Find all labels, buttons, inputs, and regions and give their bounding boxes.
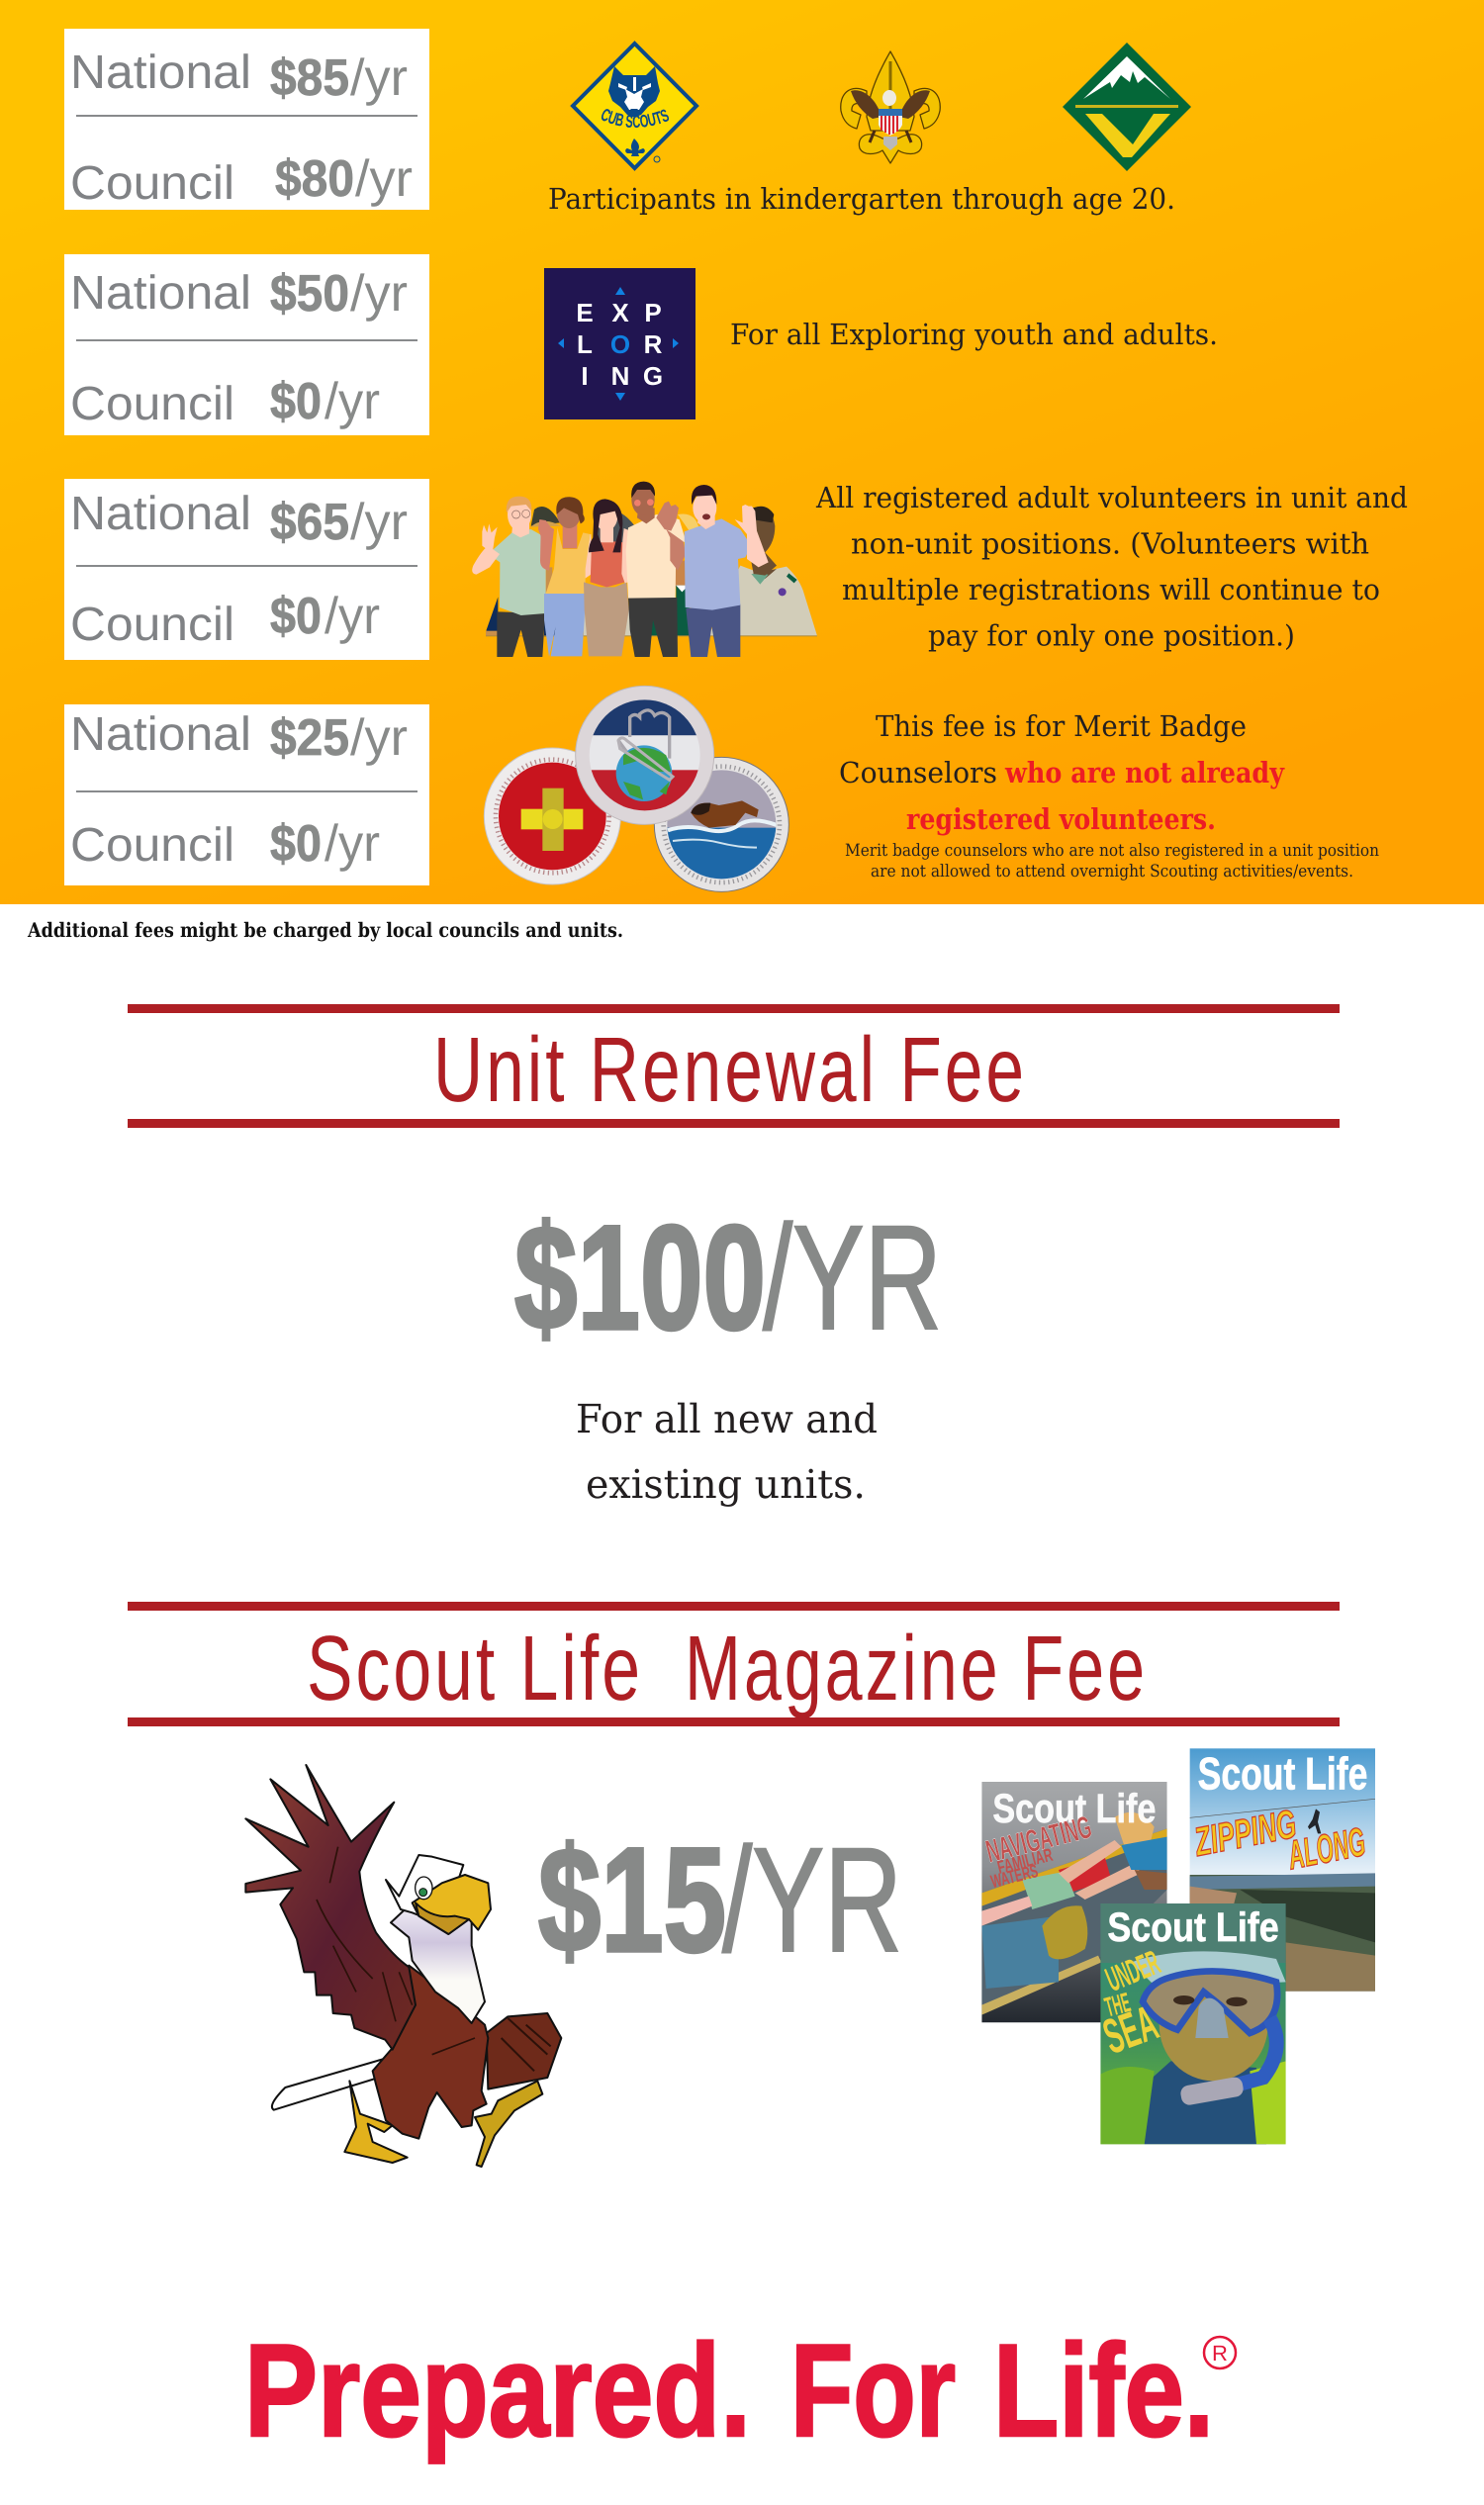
icon: Exploring logo: R bbox=[644, 329, 663, 359]
illustration: group of waving adult volunteers bbox=[472, 482, 817, 657]
fee card: exploring: /yr bbox=[350, 265, 408, 323]
text: merit badge counselor description: Merit badge counselors who are not also registered in a unit position bbox=[845, 841, 1379, 861]
badge: citizenship in the world bbox=[576, 686, 714, 824]
logo: Prepared. For Life. tagline: Prepared. bbox=[244, 2318, 751, 2464]
text: adult volunteers description bbox=[815, 481, 1408, 653]
logo: Prepared. For Life. tagline: For bbox=[790, 2318, 956, 2464]
illustration: Scout Life magazine covers bbox=[981, 1748, 1375, 2144]
fee card: youth: Council bbox=[70, 157, 234, 210]
price: $15 per year: $15 bbox=[538, 1816, 726, 1983]
fee card: adult volunteers bbox=[64, 479, 429, 660]
text: unit renewal description bbox=[576, 1397, 878, 1508]
illustration: waving eagle mascot bbox=[245, 1765, 561, 2167]
fee card: adult volunteers: National bbox=[70, 488, 251, 540]
cover: zipping along: Scout Life bbox=[1198, 1748, 1367, 1800]
icon: Exploring logo: X bbox=[611, 298, 629, 327]
text: merit badge counselor description: are not allowed to attend overnight Scouting activities/events. bbox=[871, 862, 1353, 881]
fee card: merit badge counselors: $25 bbox=[270, 709, 349, 767]
text: merit badge counselor description bbox=[839, 709, 1379, 881]
logo: Prepared. For Life. tagline bbox=[244, 2318, 1236, 2464]
heading: Unit Renewal Fee: Unit Renewal Fee bbox=[433, 1018, 1027, 1121]
text: unit renewal description: For all new and bbox=[576, 1397, 878, 1442]
cover: navigating familiar waters: NAVIGATING bbox=[982, 1809, 1095, 1869]
icon: Exploring logo: N bbox=[611, 361, 629, 391]
text: adult volunteers description: multiple registrations will continue to bbox=[842, 573, 1380, 606]
logo: Prepared. For Life. tagline: Life. bbox=[993, 2318, 1214, 2464]
fee card: adult volunteers: /yr bbox=[350, 494, 408, 551]
fee card: exploring: /yr bbox=[325, 373, 380, 430]
fee card: exploring bbox=[64, 254, 429, 435]
fee card: merit badge counselors: /yr bbox=[350, 709, 408, 767]
icon: BSA fleur-de-lis emblem bbox=[841, 51, 940, 163]
text: unit renewal description: existing units. bbox=[586, 1462, 866, 1508]
text: merit badge counselor description: This fee is for Merit Badge bbox=[876, 709, 1247, 743]
text: adult volunteers description: pay for only one position.) bbox=[928, 619, 1295, 653]
fee card: adult volunteers: $0 bbox=[270, 588, 322, 645]
cover: under the sea: SEA bbox=[1096, 1995, 1164, 2065]
icon: Cub Scouts diamond bbox=[570, 41, 699, 171]
heading: Unit Renewal Fee bbox=[128, 1004, 1340, 1128]
price: $100 per year: $100 bbox=[514, 1194, 766, 1360]
heading: Scout Life Magazine Fee bbox=[128, 1602, 1340, 1726]
fee card: merit badge counselors: $0 bbox=[270, 815, 322, 873]
cover: under the sea: UNDER bbox=[1100, 1943, 1165, 1998]
fee card: merit badge counselors: Council bbox=[70, 819, 234, 872]
fee card: youth: National bbox=[70, 46, 251, 99]
price: $100 per year: /YR bbox=[763, 1194, 942, 1360]
orange background panel bbox=[0, 0, 1484, 904]
text: merit badge counselor description: who are not already bbox=[1004, 756, 1285, 789]
text: merit badge counselor description: Counselors bbox=[839, 756, 997, 789]
fee card: youth: $85 bbox=[270, 49, 349, 107]
footnote: additional fees: Additional fees might be charged by local councils and units. bbox=[27, 918, 623, 942]
fee card: merit badge counselors bbox=[64, 704, 429, 885]
illustration: three merit badges bbox=[484, 686, 788, 891]
cover: navigating familiar waters: WATERS bbox=[988, 1860, 1040, 1892]
icon: Exploring logo: G bbox=[643, 361, 663, 391]
icon: Cub Scouts diamond: CUB SCOUTS bbox=[602, 109, 669, 129]
fee card: merit badge counselors: /yr bbox=[325, 815, 380, 873]
fee card: adult volunteers: /yr bbox=[325, 588, 380, 645]
cover: navigating familiar waters: Scout Life bbox=[992, 1786, 1156, 1831]
fee card: youth: /yr bbox=[350, 49, 408, 107]
badge: swimming bbox=[654, 757, 788, 891]
heading: Scout Life Magazine Fee: Scout Life bbox=[307, 1617, 643, 1719]
text: youth description: Participants in kindergarten through age 20. bbox=[548, 182, 1175, 216]
icon: Exploring logo: P bbox=[644, 298, 662, 327]
icon: Exploring logo: E bbox=[576, 298, 594, 327]
fee card: youth: $80 bbox=[275, 150, 354, 208]
fee card: exploring: $50 bbox=[270, 265, 349, 323]
badge: first aid bbox=[484, 748, 620, 884]
cover: under the sea bbox=[1096, 1903, 1286, 2144]
text: adult volunteers description: non-unit positions. (Volunteers with bbox=[851, 526, 1369, 560]
logo: Prepared. For Life. tagline: R bbox=[1212, 2341, 1228, 2366]
cover: under the sea: Scout Life bbox=[1107, 1904, 1279, 1950]
cover: navigating familiar waters bbox=[981, 1782, 1167, 2022]
icon: Exploring logo: O bbox=[610, 329, 630, 359]
icon: Exploring logo bbox=[544, 268, 696, 419]
fee card: exploring: $0 bbox=[270, 373, 322, 430]
text: merit badge counselor description: registered volunteers. bbox=[906, 802, 1216, 836]
text: adult volunteers description: All registered adult volunteers in unit and bbox=[815, 481, 1408, 514]
cover: zipping along: ZIPPING bbox=[1190, 1801, 1300, 1865]
cover: navigating familiar waters: FAMILIAR bbox=[995, 1844, 1055, 1878]
heading: Scout Life Magazine Fee: Magazine Fee bbox=[685, 1617, 1148, 1719]
fee card: youth bbox=[64, 29, 429, 210]
icon: Exploring logo: I bbox=[581, 361, 589, 391]
cover: zipping along: ALONG bbox=[1283, 1818, 1369, 1878]
fee card: adult volunteers: Council bbox=[70, 599, 234, 651]
price: $15 per year: /YR bbox=[722, 1816, 902, 1983]
cover: under the sea: THE bbox=[1101, 1987, 1134, 2022]
fee card: exploring: National bbox=[70, 267, 251, 320]
fee card: youth: /yr bbox=[355, 150, 413, 208]
icon: Venturing diamond bbox=[1063, 43, 1191, 171]
fee card: merit badge counselors: National bbox=[70, 708, 251, 761]
fee card: exploring: Council bbox=[70, 378, 234, 430]
text: exploring description: For all Exploring youth and adults. bbox=[730, 318, 1218, 351]
icon: Exploring logo: L bbox=[577, 329, 593, 359]
price: $15 per year bbox=[538, 1816, 902, 1983]
fee card: adult volunteers: $65 bbox=[270, 494, 349, 551]
cover: zipping along bbox=[1190, 1748, 1375, 1992]
